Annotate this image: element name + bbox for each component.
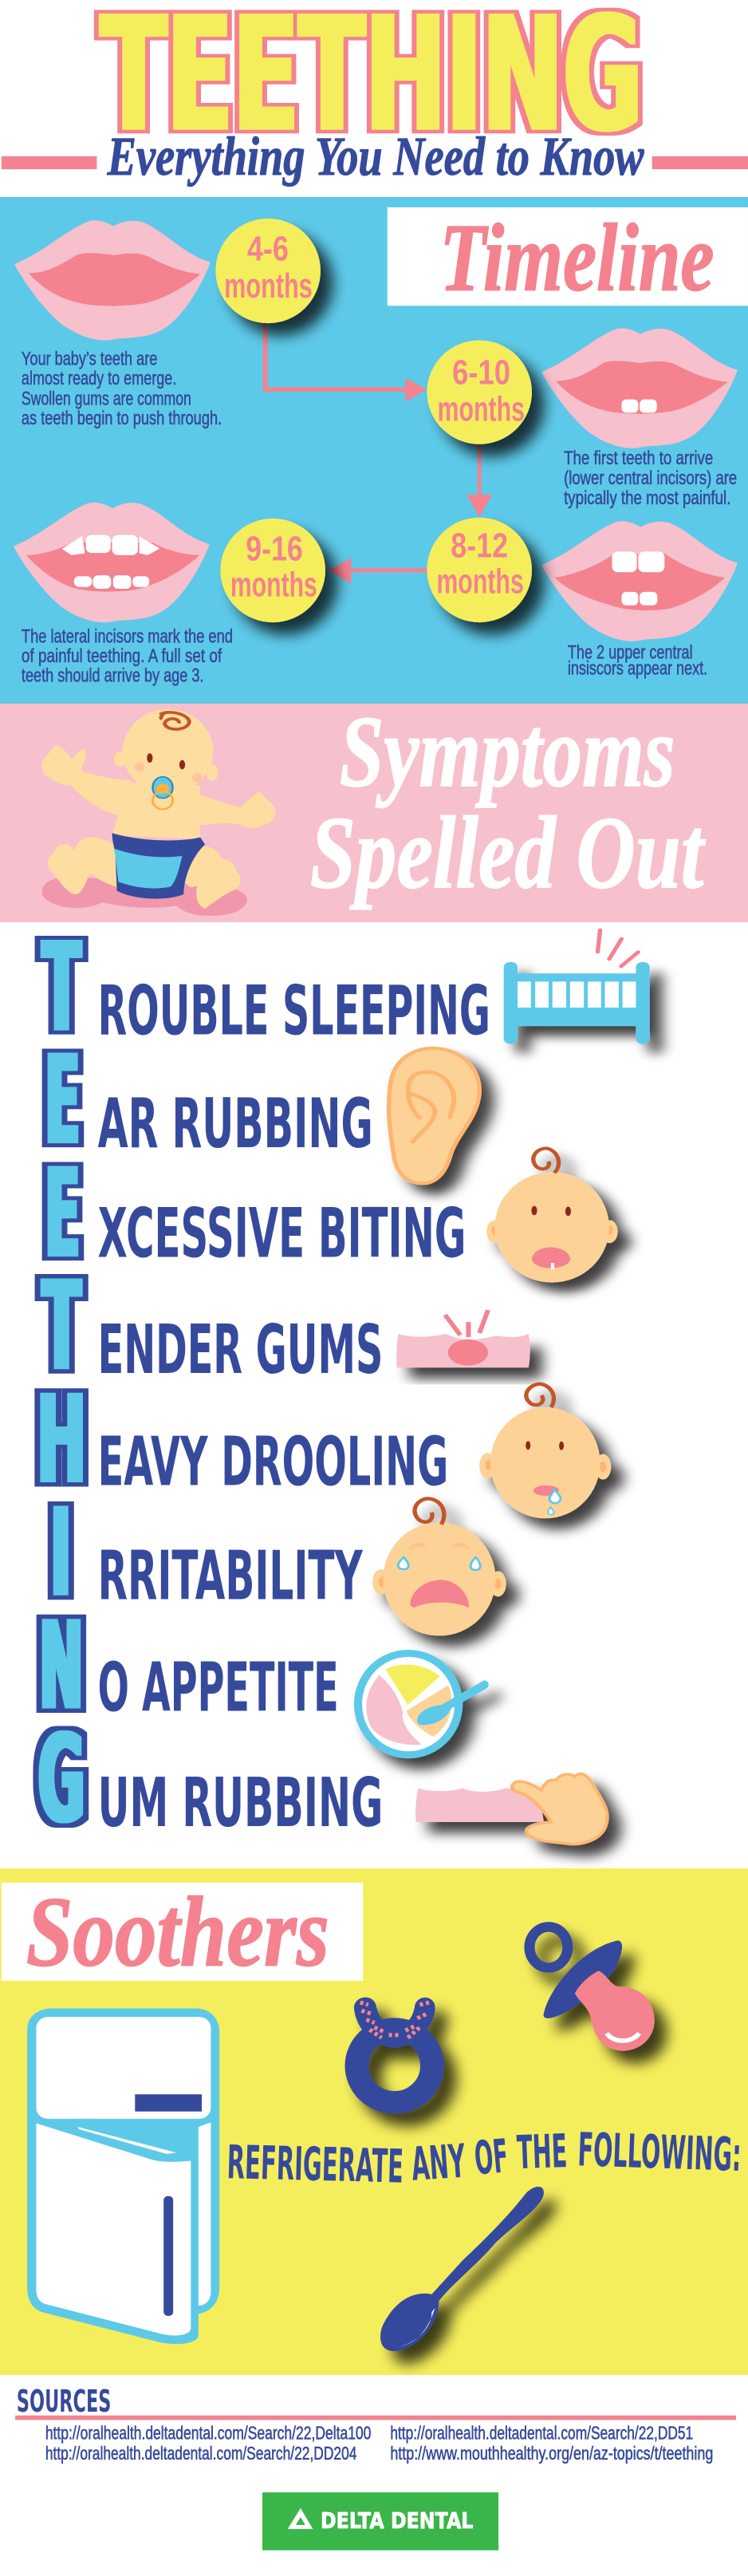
heading: symptoms spelled out — [310, 696, 706, 910]
text: refrigerate any of the following: ANY — [410, 2135, 467, 2191]
logo: delta dental: DELTA DENTAL — [321, 2508, 474, 2534]
badge: 4-6 months — [215, 219, 321, 323]
icon: refrigerator — [27, 2008, 219, 2344]
icon: spoon — [380, 2187, 544, 2351]
row: heavy drooling — [37, 1369, 448, 1511]
sources heading: SOURCES — [17, 2384, 111, 2420]
icon: baby crying — [372, 1498, 506, 1636]
mouth: lateral incisors — [14, 503, 210, 622]
sources rule — [15, 2416, 736, 2420]
left rule — [2, 156, 96, 169]
panel: soothers — [0, 1868, 748, 2375]
panel: symptoms banner — [0, 696, 748, 922]
badge: 8-12 months: 8-12 — [451, 526, 508, 565]
text: 4-6 months description: almost ready to emerge. — [22, 368, 176, 389]
icon: finger rubbing gum — [415, 1774, 608, 1844]
badge: 6-10 months: months — [438, 389, 525, 428]
mouth: two lower teeth — [541, 329, 738, 448]
icon: baby drooling — [479, 1384, 611, 1518]
arrow: 6-10 to 8-12 — [467, 444, 492, 517]
text: 4-6 months description: Your baby’s teeth are — [22, 348, 157, 369]
row: excessive biting — [45, 1142, 466, 1286]
badge: 6-10 months: 6-10 — [452, 353, 510, 392]
heading: soothers: Soothers — [26, 1877, 329, 1987]
text: refrigerate any of the following: OF — [472, 2130, 510, 2186]
text: 4-6 months description: as teeth begin to push through. — [22, 408, 222, 429]
text: 4-6 months description — [22, 348, 222, 429]
text: 4-6 months description: Swollen gums are common — [22, 388, 191, 409]
icon: teether — [354, 1998, 435, 2102]
icon: tender gum — [396, 1334, 530, 1367]
panel: timeline — [0, 197, 748, 704]
mouth: upper and lower teeth — [541, 521, 738, 641]
text: 9-16 months description: teeth should arrive by age 3. — [22, 665, 203, 687]
badge: 9-16 months: 9-16 — [246, 529, 303, 568]
row: no appetite: N — [40, 1595, 83, 1737]
icon: pain lines — [445, 1310, 488, 1337]
row: heavy drooling: H — [37, 1369, 86, 1511]
text: 9-16 months description — [22, 625, 233, 687]
icon: pacifier — [530, 1927, 655, 2051]
badge: 8-12 months: months — [436, 562, 524, 601]
panel: symptom acrostic: RRITABILITY — [98, 1537, 364, 1615]
row: gum rubbing — [38, 1708, 383, 1850]
icon: crib noise lines — [598, 930, 638, 966]
panel: symptom acrostic: AR RUBBING — [98, 1083, 373, 1163]
text: 8-12 months description — [568, 641, 707, 680]
right rule — [652, 156, 748, 169]
row: ear rubbing — [45, 1029, 373, 1173]
badge: 9-16 months: months — [230, 565, 317, 604]
text: 9-16 months description: The lateral incisors mark the end — [22, 625, 233, 647]
source links: http://oralhealth.deltadental.com/Search/22,DD204 — [45, 2443, 356, 2464]
mouth: closed gums — [14, 220, 211, 341]
icon: baby biting — [486, 1148, 618, 1283]
row: tender gums: T — [42, 1255, 81, 1398]
logo: delta dental — [262, 2492, 498, 2550]
panel: sources and logo — [15, 2384, 736, 2550]
icon: crib — [504, 962, 650, 1044]
row: ear rubbing: E — [45, 1029, 80, 1173]
panel: symptom acrostic — [37, 916, 650, 1850]
icon: plate and spoon — [354, 1650, 489, 1758]
icon: baby with pacifier — [41, 709, 276, 916]
row: gum rubbing: G — [38, 1708, 85, 1850]
row: no appetite — [40, 1595, 339, 1737]
badge: 4-6 months: months — [224, 266, 313, 306]
badge: 8-12 months — [427, 518, 532, 622]
panel: symptom acrostic: O APPETITE — [98, 1649, 339, 1727]
text: refrigerate any of the following — [226, 2124, 742, 2194]
row: irritability — [50, 1481, 364, 1623]
text: 6-10 months description — [564, 448, 737, 509]
badge: 6-10 months — [427, 341, 532, 444]
text: 9-16 months description: of painful teething. A full set of — [22, 645, 222, 667]
badge: 4-6 months: 4-6 — [247, 229, 289, 268]
source links — [45, 2423, 713, 2464]
arrow: 4-6 to 6-10 — [266, 323, 427, 401]
row: irritability: I — [50, 1481, 71, 1623]
row: excessive biting: E — [45, 1142, 80, 1286]
text: 8-12 months description: The 2 upper central — [568, 641, 693, 663]
text: refrigerate any of the following: REFRIGERATE — [226, 2136, 404, 2194]
header — [2, 0, 748, 187]
arrow: 8-12 to 9-16 — [329, 558, 427, 584]
panel: symptom acrostic: ENDER GUMS — [98, 1311, 383, 1390]
badge: 9-16 months — [220, 519, 325, 622]
source links: http://oralhealth.deltadental.com/Search/22,Delta100 — [45, 2423, 371, 2443]
panel: symptom acrostic: UM RUBBING — [98, 1764, 383, 1843]
icon: ear — [389, 1048, 479, 1184]
text: refrigerate any of the following: THE — [516, 2125, 568, 2180]
row: trouble sleeping: T — [42, 916, 81, 1059]
row: trouble sleeping — [42, 916, 490, 1059]
row: tender gums — [42, 1255, 383, 1398]
